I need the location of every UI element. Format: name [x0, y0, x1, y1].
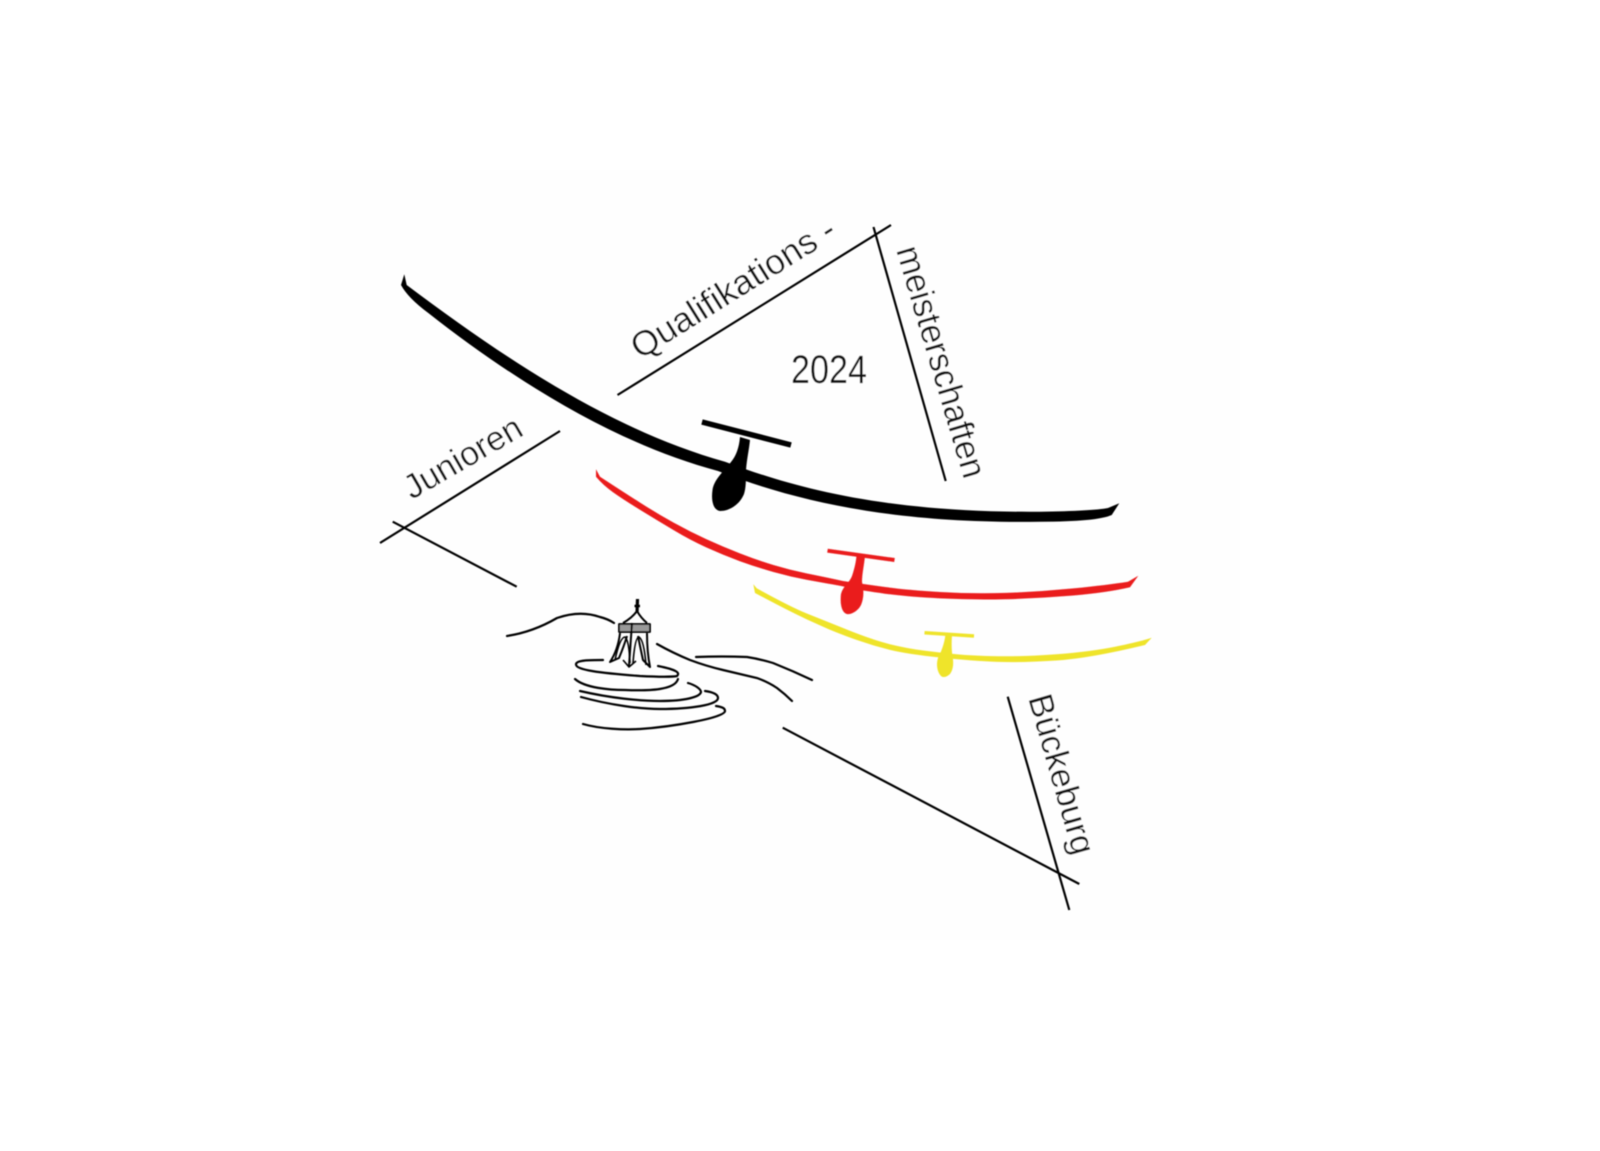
glider: black [401, 274, 1119, 522]
icon: monument tower [610, 599, 650, 667]
terrace 3 [580, 683, 701, 701]
frame line: meisterschaften [874, 227, 946, 481]
terrace 2 [575, 679, 678, 690]
terrace 5 [583, 706, 725, 729]
frame line: lower right [783, 728, 1079, 884]
frame line: Bückeburg [1008, 697, 1069, 910]
frame line: Junioren [380, 431, 560, 543]
text: meisterschaften: meisterschaften [888, 241, 994, 482]
glider: yellow [753, 584, 1152, 677]
hill [507, 614, 614, 636]
text: Qualifikations: Qualifikations - [624, 210, 843, 367]
glider: red [596, 469, 1138, 614]
terrace 4 [581, 691, 718, 709]
river bank 1 [657, 644, 792, 701]
text: Junioren: Junioren [397, 409, 529, 507]
frame line: lower left [393, 522, 517, 587]
text: Bückeburg: Bückeburg [1020, 690, 1102, 859]
landscape with hill, river and terraces [507, 614, 812, 729]
terrace 1 [576, 660, 678, 677]
river bank 2 [696, 656, 812, 680]
frame line: Qualifikations [618, 225, 891, 395]
text: year: 2024 [791, 348, 867, 392]
